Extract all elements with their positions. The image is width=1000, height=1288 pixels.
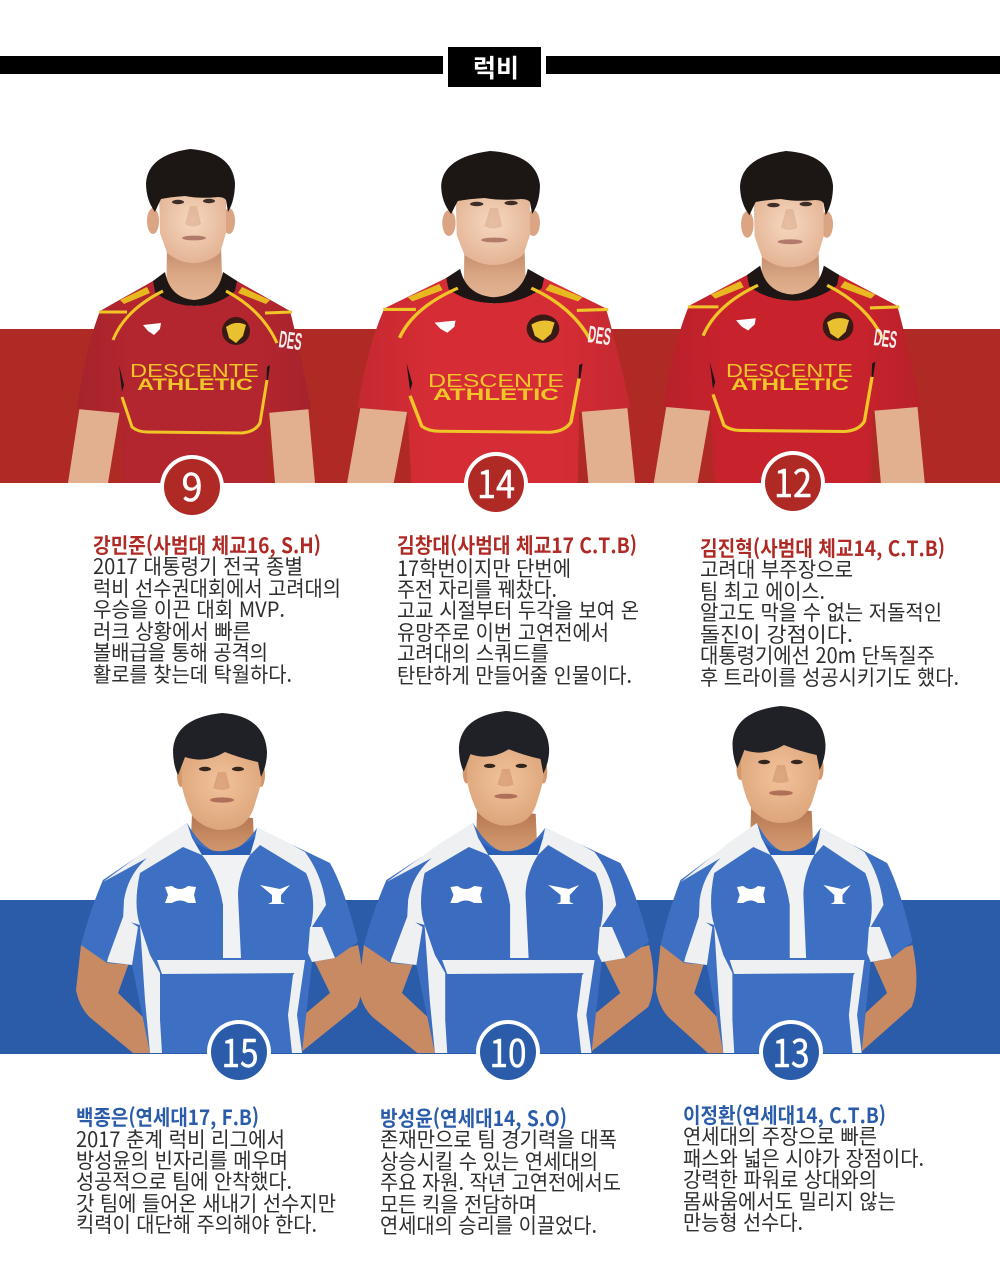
profile text: 방성윤: 상승시킬 수 있는 연세대의: [380, 1146, 598, 1176]
profile text: 백종은: 킥력이 대단해 주의해야 한다.: [76, 1209, 317, 1239]
player photo: 방성윤: [359, 711, 654, 1053]
player photo: 강민준: [68, 149, 315, 483]
profile text: 김창대: 탄탄하게 만들어줄 인물이다.: [397, 660, 632, 690]
player photo: 김창대: DES: [586, 321, 613, 351]
profile text: 강민준: 러크 상황에서 빠른: [93, 616, 251, 646]
player photo: 김창대: DESCENTE: [428, 370, 564, 391]
jersey number 13: 13: [772, 1023, 810, 1078]
jersey number 12: [761, 451, 825, 515]
blue band behind Yonsei University players: [0, 900, 1000, 1054]
profile text: 이정환: [683, 1100, 924, 1237]
profile text: 방성윤: 연세대의 승리를 이끌었다.: [380, 1210, 597, 1240]
player photo: 김진혁: DESCENTE: [726, 360, 853, 381]
profile text: 강민준: 강민준(사범대 체교16, S.H): [93, 530, 321, 560]
player photo: 강민준: DESCENTE: [130, 360, 259, 381]
player photo: 김창대: ATHLETIC: [433, 385, 559, 404]
profile text: 백종은: 2017 춘계 럭비 리그에서: [76, 1124, 285, 1154]
profile text: 백종은: [76, 1102, 336, 1239]
jersey number 15: [207, 1020, 271, 1084]
jersey number 13: [759, 1020, 823, 1084]
profile text: 김진혁: 팀 최고 에이스.: [700, 576, 825, 606]
jersey number 12: 12: [774, 453, 812, 508]
player photo: 강민준: DES: [277, 326, 304, 356]
profile text: 김창대: 김창대(사범대 체교17 C.T.B): [397, 530, 637, 560]
title bar: 럭비: 럭비: [473, 49, 519, 85]
profile text: 김창대: 유망주로 이번 고연전에서: [397, 617, 609, 647]
profile text: 방성윤: [380, 1103, 621, 1240]
profile text: 방성윤: 존재만으로 팀 경기력을 대폭: [380, 1124, 617, 1154]
profile text: 김진혁: 후 트라이를 성공시키기도 했다.: [700, 662, 959, 692]
profile text: 이정환: 패스와 넓은 시야가 장점이다.: [683, 1143, 924, 1173]
profile text: 김창대: 고교 시절부터 두각을 보여 온: [397, 595, 639, 625]
jersey number 10: [476, 1020, 540, 1084]
jersey number 9: [160, 455, 224, 519]
profile text: 방성윤: 방성윤(연세대14, S.O): [380, 1103, 567, 1133]
profile text: 김창대: [397, 530, 639, 690]
profile text: 김진혁: 알고도 막을 수 없는 저돌적인: [700, 597, 942, 627]
player photo: 백종은: [76, 713, 362, 1053]
jersey number 15: 15: [222, 1023, 258, 1078]
profile text: 백종은: 성공적으로 팀에 안착했다.: [76, 1166, 292, 1196]
red band behind Korea University players: [0, 329, 1000, 483]
title bar: 럭비: [0, 47, 1000, 87]
player photo: 강민준: ATHLETIC: [137, 375, 253, 394]
player photo: 이정환: [656, 706, 916, 1053]
profile text: 김진혁: [700, 533, 959, 692]
jersey number 9: 9: [181, 457, 203, 512]
player photo: 김진혁: DES: [872, 324, 899, 354]
profile text: 강민준: 2017 대통령기 전국 종별: [93, 551, 303, 581]
profile text: 방성윤: 주요 자원. 작년 고연전에서도: [380, 1167, 621, 1197]
profile text: 강민준: [93, 530, 341, 689]
player photo: 김진혁: [654, 151, 925, 483]
profile text: 이정환: 몸싸움에서도 밀리지 않는: [683, 1186, 896, 1216]
profile text: 강민준: 럭비 선수권대회에서 고려대의: [93, 573, 341, 603]
profile text: 방성윤: 모든 킥을 전담하며: [380, 1189, 537, 1219]
profile text: 김진혁: 고려대 부주장으로: [700, 554, 853, 584]
profile text: 김창대: 고려대의 스쿼드를: [397, 638, 549, 668]
profile text: 김창대: 17학번이지만 단번에: [397, 553, 571, 583]
jersey number 10: 10: [490, 1023, 526, 1078]
profile text: 이정환: 연세대의 주장으로 빠른: [683, 1121, 877, 1151]
profile text: 강민준: 볼배급을 통해 공격의: [93, 637, 268, 667]
profile text: 이정환: 이정환(연세대14, C.T.B): [683, 1100, 886, 1130]
profile text: 김창대: 주전 자리를 꿰찼다.: [397, 574, 557, 604]
profile text: 김진혁: 돌진이 강점이다.: [700, 619, 853, 649]
profile text: 백종은: 백종은(연세대17, F.B): [76, 1102, 259, 1132]
profile text: 강민준: 활로를 찾는데 탁월하다.: [93, 659, 292, 689]
profile text: 백종은: 방성윤의 빈자리를 메우며: [76, 1145, 288, 1175]
jersey number 14: [464, 452, 528, 516]
profile text: 백종은: 갓 팀에 들어온 새내기 선수지만: [76, 1188, 336, 1218]
jersey number 14: 14: [477, 454, 515, 509]
profile text: 이정환: 만능형 선수다.: [683, 1207, 803, 1237]
player photo: 김진혁: ATHLETIC: [731, 375, 849, 394]
profile text: 김진혁: 대통령기에선 20m 단독질주: [700, 640, 935, 670]
player photo: 김창대: [347, 151, 635, 483]
profile text: 김진혁: 김진혁(사범대 체교14, C.T.B): [700, 533, 945, 563]
profile text: 이정환: 강력한 파워로 상대와의: [683, 1164, 877, 1194]
profile text: 강민준: 우승을 이끈 대회 MVP.: [93, 594, 285, 624]
